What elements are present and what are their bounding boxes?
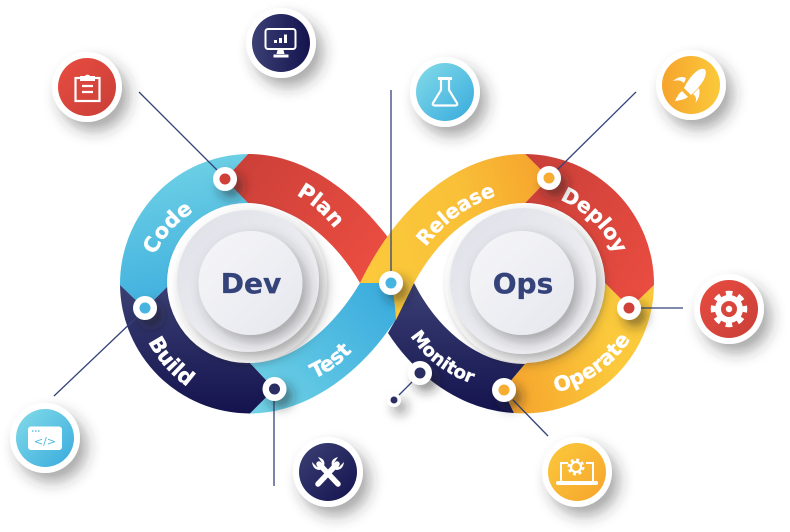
segment: Operate [508,283,654,414]
icon: wrench and spanner [293,437,363,507]
icon: monitor chart [246,8,316,78]
icon: flask [410,57,480,127]
segment: Release [360,154,540,320]
icon: code window: </> [34,435,56,448]
infinity loop band [120,154,654,414]
segment: Test [250,283,396,414]
segment: Monitor [388,283,525,413]
icon: rocket [656,50,726,120]
label: Dev: Dev [221,267,281,300]
segment: Build: Build [148,336,196,386]
node markers [133,166,641,407]
segment: Plan [233,154,388,283]
segment: Code [120,154,248,300]
segment: Deploy [525,154,654,300]
icon: clipboard [52,52,122,122]
segment: Plan: Plan [298,182,342,228]
segment: Test: Test [308,343,352,377]
icon: laptop gear [542,437,612,507]
segment: Deploy: Deploy [561,186,626,250]
segment: Build [120,285,266,414]
icon: gear [694,274,764,344]
segment: Operate: Operate [554,335,630,391]
disc: Ops [445,203,605,363]
disc: Dev [167,203,327,363]
segment: Release: Release [416,187,495,246]
segment: Monitor: Monitor [410,329,476,382]
segment: Code: Code [144,204,192,252]
connector lines [54,90,683,486]
label: Ops: Ops [493,267,553,300]
icon: code window [10,403,80,473]
